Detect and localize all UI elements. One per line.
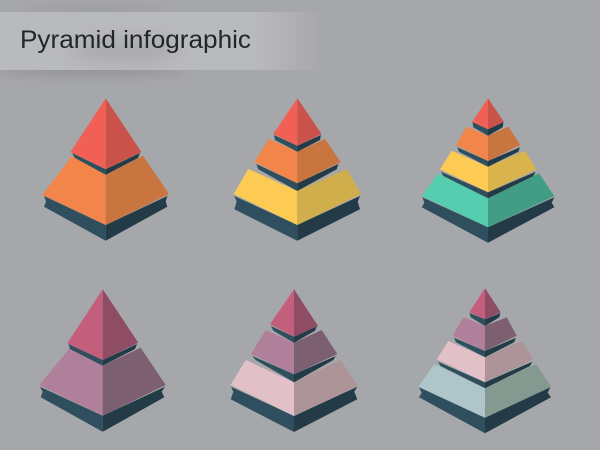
title banner xyxy=(0,7,325,75)
tier: rose apex xyxy=(270,289,318,337)
tier: yellow xyxy=(234,169,361,225)
tier: rose top shadow xyxy=(68,344,137,366)
tier: red apex xyxy=(70,98,141,169)
tier: mauve shadow xyxy=(252,356,336,382)
tier: red apex xyxy=(273,98,322,146)
tier: orange shadow xyxy=(256,164,338,191)
tier: pink shadow xyxy=(438,362,532,388)
tier: rose top shadow xyxy=(470,313,500,326)
tier: yellow xyxy=(440,151,536,192)
pyramid: four tiers, muted xyxy=(418,288,551,433)
tier: red apex xyxy=(472,98,504,129)
tier: orange xyxy=(42,156,169,225)
tier: rose apex xyxy=(469,288,501,319)
tier: mauve xyxy=(39,348,166,416)
tier: rose apex xyxy=(67,289,138,360)
title: Pyramid infographic xyxy=(20,26,251,54)
pyramid: four tiers, warm xyxy=(422,98,554,243)
tier: red top shadow xyxy=(274,135,321,152)
tier: base shadow block xyxy=(40,387,165,432)
tier: yellow shadow xyxy=(441,172,536,198)
tier: teal xyxy=(422,173,554,227)
pyramid: three tiers, muted xyxy=(231,289,358,432)
pyramid: three tiers, warm xyxy=(234,98,361,241)
tier: base shadow block xyxy=(44,196,167,241)
tier: base shadow block xyxy=(231,387,357,432)
tier: base shadow block xyxy=(419,387,551,433)
pyramid: two tiers, warm xyxy=(42,98,169,241)
tier: orange xyxy=(254,139,341,183)
tier: mauve xyxy=(453,317,517,351)
tier: pale blue xyxy=(418,364,551,418)
tier: base shadow block xyxy=(234,196,360,241)
tier: mauve shadow xyxy=(454,338,516,357)
tier: mauve xyxy=(251,330,337,374)
tier: rose top shadow xyxy=(271,326,317,343)
tier: pink xyxy=(437,341,533,382)
tier: base shadow block xyxy=(422,197,554,243)
pyramid: two tiers, muted xyxy=(39,289,166,432)
tier: pink xyxy=(231,360,358,416)
tier: orange shadow xyxy=(457,147,520,167)
tier: red top shadow xyxy=(72,153,140,175)
tier: orange xyxy=(456,127,520,161)
tier: red top shadow xyxy=(472,122,504,136)
